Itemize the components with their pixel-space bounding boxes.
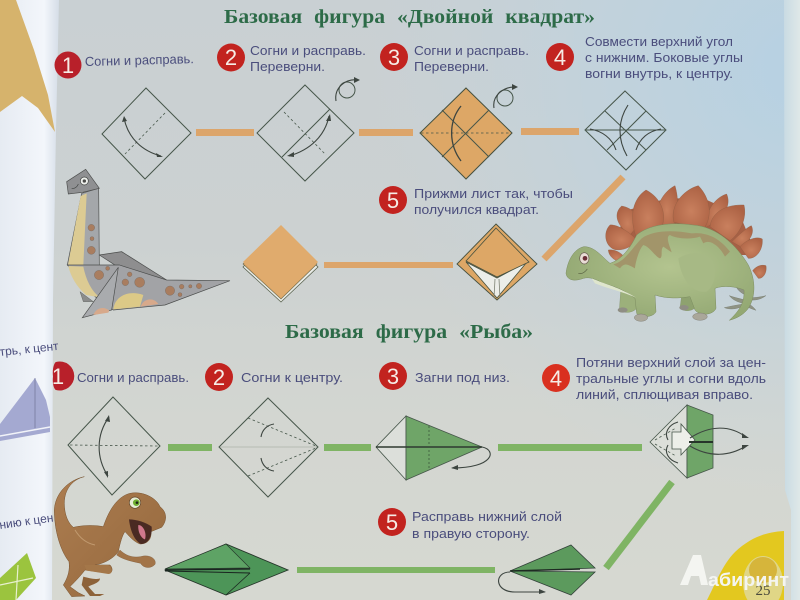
page number marker: 25: [756, 583, 770, 599]
left page text fragments: [0, 339, 60, 532]
belly highlight: [592, 278, 636, 298]
step 3 badge: [380, 43, 408, 71]
connector bar: [324, 262, 453, 268]
fish step 5 badge: 5: [386, 510, 398, 535]
title: fish: Базовая фигура «Рыба»: [285, 321, 533, 343]
diagram: fish step 5: [499, 545, 595, 595]
fish step 4 badge: [542, 364, 570, 392]
step 4 badge: 4: [554, 45, 566, 70]
diagram: fish step 1: [68, 397, 160, 495]
page number marker: [743, 556, 783, 600]
feet: [634, 314, 648, 321]
fish step 2 text: Согни к центру.: [241, 370, 343, 385]
step 4 badge: [546, 43, 574, 71]
diagram: fish result: [165, 544, 288, 595]
step 3 badge: 3: [388, 45, 400, 70]
step 1 text: Согни и расправь.: [85, 51, 194, 69]
step 2 badge: 2: [225, 45, 237, 70]
back pattern: [613, 231, 730, 268]
step 5 text: получился квадрат.: [414, 202, 539, 217]
step 3 text: [414, 43, 529, 74]
origami fragment: yellow figure: [0, 0, 55, 132]
connector bar: [196, 129, 254, 136]
eye: [580, 253, 589, 264]
yellow page corner: [707, 531, 784, 600]
panel: facing left page: [0, 0, 59, 600]
fish step 3 text: Загни под низ.: [415, 370, 510, 385]
step 3 text: Согни и расправь.: [414, 43, 529, 58]
origami fragment: blue figure: [0, 378, 50, 441]
far arm: [117, 550, 155, 567]
hind leg: [82, 577, 104, 596]
step 4 text: [585, 34, 743, 81]
connector bar: [324, 444, 371, 451]
diagram: fish step 4: [650, 405, 749, 478]
fish step 1 text: Согни и расправь.: [77, 370, 189, 385]
step 2 text: [250, 43, 366, 74]
fish step 5 text: Расправь нижний слой: [412, 509, 562, 524]
watermark: [680, 555, 789, 590]
fish step 1 badge: 1: [52, 364, 64, 389]
fish step 5 badge: [378, 508, 406, 536]
body: [566, 224, 754, 320]
diagonal connector bar: [606, 482, 672, 568]
step 2 text: Переверни.: [250, 59, 325, 74]
fish step 4 text: тральные углы и согни вдоль: [576, 371, 766, 386]
eye: [129, 497, 141, 508]
step 5 text: [414, 186, 573, 217]
illustration: stegosaurus: [566, 186, 766, 321]
origami fragment: green figure: [0, 553, 36, 600]
connector bar: [297, 567, 495, 573]
diagram: square step 1: [102, 88, 191, 179]
step 2 badge: [217, 44, 245, 72]
diagram: fish step 2: [219, 398, 318, 497]
fish step 2 badge: 2: [213, 365, 225, 390]
dorsal plates: [606, 186, 766, 278]
fish step 5 text: в правую сторону.: [412, 526, 530, 541]
step 5 text: Прижми лист так, чтобы: [414, 186, 573, 201]
tail spikes: [724, 285, 766, 310]
body and tail: [54, 477, 166, 597]
illustration: tyrannosaurus: [54, 477, 166, 597]
step 2 text: Согни и расправь.: [250, 43, 366, 58]
fish step 4 text: Потяни верхний слой за цен-: [576, 355, 766, 370]
connector bar: [168, 444, 212, 451]
legs: [619, 292, 637, 312]
connector bar: [359, 129, 413, 136]
fish step 4 text: [576, 355, 766, 402]
step 1 badge: 1: [62, 53, 74, 78]
title: double square: Базовая фигура «Двойной квадрат»: [224, 6, 595, 28]
diagram: orange folded shape step 5: [457, 224, 537, 300]
mouth: [129, 519, 152, 544]
diagram: fish step 3: [376, 416, 490, 480]
fish step 2 badge: [205, 363, 233, 391]
fish step 3 badge: 3: [387, 364, 399, 389]
step 4 text: Совмести верхний угол: [585, 34, 733, 49]
step 1 badge: [54, 52, 82, 78]
diagram: orange square step 3: [420, 84, 518, 179]
step 4 text: вогни внутрь, к центру.: [585, 66, 733, 81]
fish step 4 text: линий, сплющивая вправо.: [576, 387, 753, 402]
connector bar: [498, 444, 642, 451]
diagram: orange square result: [243, 225, 318, 302]
fish step 4 badge: 4: [550, 366, 562, 391]
diagonal connector bar: [544, 177, 623, 259]
left page text fragments: трь, к цент: [0, 339, 60, 359]
diagram: square step 4: [585, 91, 666, 170]
step 4 text: с нижним. Боковые углы: [585, 50, 743, 65]
watermark: абиринт: [708, 570, 789, 590]
arm near: [84, 565, 112, 574]
step 3 text: Переверни.: [414, 59, 489, 74]
connector bar: [521, 128, 579, 135]
fish step 1 badge: [52, 362, 74, 390]
step 5 badge: 5: [387, 188, 399, 213]
fish step 3 badge: [379, 362, 407, 390]
diagram: square step 2: [257, 77, 360, 181]
fish step 5 text: [412, 509, 562, 541]
illustration: origami brachiosaurus: [67, 169, 230, 318]
left page text fragments: нию к цен: [0, 511, 54, 532]
step 5 badge: [379, 186, 407, 214]
